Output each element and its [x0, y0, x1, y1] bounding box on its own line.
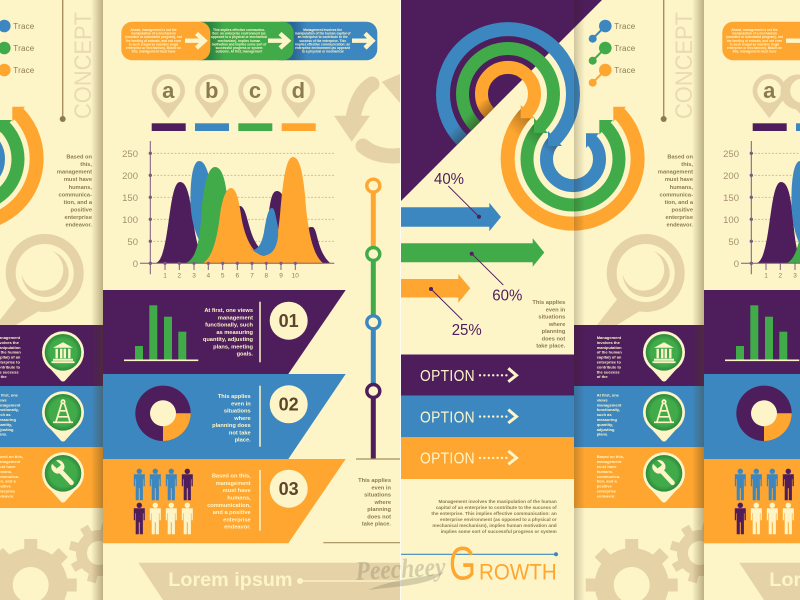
- side note: does not: [542, 336, 565, 342]
- legend: trace: Trace: [614, 66, 636, 75]
- donut chart: [135, 386, 191, 441]
- x axis labels: 8: [264, 272, 268, 280]
- step 02 text: not take: [229, 430, 251, 436]
- legend pin: a: [152, 74, 185, 118]
- panel: left strip repeat: [0, 0, 129, 600]
- fold shadow: left page edge: [91, 0, 103, 600]
- ribbon: orange segment: the herding of animals, and not even: [126, 39, 181, 43]
- legend: trace: Trace: [614, 44, 636, 53]
- panel: centre page: [400, 0, 638, 600]
- paragraph: management: Management involves the manipulation of the human: [438, 499, 557, 504]
- option band: blue: [401, 396, 574, 437]
- band text: purple: of the human: [597, 350, 622, 355]
- band text: blue: measuring: [597, 417, 617, 422]
- page surface: [103, 0, 400, 600]
- series: orange: [203, 157, 323, 263]
- legend: trace dots: Trace: [13, 44, 35, 53]
- step 01 text: plans, meeting: [213, 344, 254, 350]
- paragraph: based on this: endeavor.: [666, 223, 693, 229]
- y axis labels: 200: [122, 171, 138, 182]
- area chart: [723, 141, 800, 280]
- footer banner: [739, 563, 800, 600]
- paragraph: based on this: this,: [80, 162, 92, 168]
- step 01 text: At first, one views: [204, 308, 253, 314]
- area chart: 3: [793, 272, 797, 280]
- x axis labels: 7: [250, 272, 254, 280]
- option band: purple: [401, 354, 574, 396]
- x axis labels: 2: [177, 272, 181, 280]
- ribbon: orange segment: enterprise or mechanism). Based on: [727, 46, 782, 50]
- band text: blue: plans.: [597, 432, 608, 437]
- step 01 text: as measuring: [216, 330, 254, 336]
- page surface: [400, 0, 574, 600]
- callout: 60%: [470, 252, 522, 304]
- ribbon: green segment: [190, 22, 294, 60]
- icon: small gear: [69, 523, 129, 583]
- callout: 40%: [434, 171, 481, 219]
- option band: orange: OPTION: [420, 451, 475, 468]
- x axis labels: 9: [279, 272, 283, 280]
- step 03 band: [704, 459, 800, 543]
- y axis labels: 50: [127, 237, 138, 248]
- ribbon: green segment: motivation and implies some sort of: [212, 42, 267, 46]
- legend pin: a: a: [763, 78, 776, 103]
- x axis labels: [163, 272, 299, 280]
- step 03 text: humans,: [227, 496, 251, 502]
- paragraph: based on this: enterprise: [64, 215, 92, 221]
- fold shadow: centre fold: [574, 0, 585, 600]
- step 02 badge: [260, 385, 308, 447]
- side note: This applies: [358, 478, 391, 484]
- step 01 band: [704, 290, 800, 374]
- paragraph: based on this: endeavor.: [65, 223, 92, 229]
- side note: where: [374, 500, 391, 506]
- ribbon: orange segment: in such a legal as machine (legal: [730, 42, 779, 46]
- step 03 band: [103, 459, 346, 543]
- area chart: 1: [764, 272, 768, 280]
- ribbon: orange segment: this, management must have: [733, 50, 777, 54]
- people pictogram: [134, 469, 193, 534]
- ribbon: orange segment: in such a legal as machine (legal: [129, 42, 178, 46]
- y axis labels: [122, 149, 138, 270]
- ribbon: blue segment: to a physical or mechanical: [302, 50, 344, 54]
- lower ring: blue: [547, 133, 600, 186]
- icon: small gear: [670, 523, 730, 583]
- legend: trace: [589, 20, 636, 87]
- callout: 60%: 60%: [492, 288, 522, 304]
- option band: purple: OPTION: [420, 368, 475, 385]
- legend: trace dots: Trace: [13, 66, 35, 75]
- band text: orange: must have: [597, 464, 617, 469]
- band text: purple: of the: [597, 374, 608, 379]
- watermark: Peecheey: [354, 551, 447, 586]
- ribbon: blue segment: an enterprise to contribute to the: [298, 35, 348, 39]
- x axis labels: 5: [221, 272, 225, 280]
- band text: orange: Based on this,: [597, 454, 624, 459]
- step 01 band: [103, 290, 346, 374]
- upper ring: orange: [481, 67, 535, 118]
- side note: This applies: [532, 300, 565, 306]
- area chart: 250: [723, 149, 739, 160]
- side note: take place.: [536, 344, 566, 350]
- legend pin: b: [195, 74, 228, 118]
- mini bar chart: [124, 305, 198, 361]
- step 02 text: even in: [231, 401, 251, 407]
- band text: blue: functionally,: [597, 407, 620, 412]
- legend pin: b, cropped: [780, 74, 800, 114]
- side note: where: [548, 322, 565, 328]
- paragraph: management: enterprise environment (as opposed to a physical or: [440, 517, 557, 522]
- side note: [323, 459, 400, 543]
- step 03 text: communication,: [207, 503, 251, 509]
- header ribbon: [121, 22, 377, 60]
- step 02 band: [103, 374, 346, 459]
- icon: recycle arrows: [334, 74, 400, 156]
- step 01 text: functionally, such: [205, 323, 254, 329]
- concept heading: CONCEPT: [70, 12, 97, 119]
- y axis labels: 100: [122, 215, 138, 226]
- paragraph: based on this: must have: [665, 177, 693, 183]
- area chart: 50: [728, 237, 739, 248]
- ribbon: blue segment: enterprise environment (as opposed: [295, 46, 350, 50]
- side note: even in: [546, 307, 566, 313]
- growth heading: G: [449, 536, 476, 589]
- icon: tower pin: [42, 391, 84, 442]
- ribbon: blue segment: success of the enterprise. This: [299, 39, 346, 43]
- series: blue peak: [190, 161, 212, 250]
- icon: bank pin: [42, 331, 84, 382]
- x axis labels: 10: [292, 272, 299, 280]
- x axis labels: 1: [163, 272, 167, 280]
- band text: blue: At first, one: [597, 392, 620, 398]
- paragraph: management: capital of an enterprise to contribute to the success of: [436, 505, 557, 510]
- step 01 badge: 01: [279, 311, 299, 331]
- legend: trace: Trace: [614, 22, 636, 31]
- ribbon: green segment: mechanism), implies human: [218, 39, 260, 43]
- band text: blue: quantity,: [597, 422, 613, 427]
- band: purple: [574, 325, 704, 386]
- paragraph: management: mechanical mechanism), implies human motivation and: [432, 523, 557, 528]
- page edge highlight: [400, 0, 401, 600]
- y axis labels: 250: [122, 149, 138, 160]
- concept line: [60, 0, 66, 122]
- concept heading: CONCEPT: [671, 12, 698, 119]
- band: blue: [0, 386, 103, 447]
- area chart: [122, 141, 335, 280]
- band text: purple: the success: [597, 369, 620, 374]
- series: purple: [156, 182, 330, 263]
- side note: does not: [367, 514, 391, 520]
- ribbon: orange segment: the herding of animals, and not even: [727, 39, 782, 43]
- y axis labels: 150: [122, 193, 138, 204]
- paragraph: based on this: positive: [672, 207, 693, 213]
- band: blue: [574, 386, 704, 447]
- ribbon: orange segment: enterprise or mechanism). Based on: [126, 46, 181, 50]
- ribbon: green segment: tion: an enterprise environment (as: [212, 32, 266, 36]
- spiral fragment: lower rings: [0, 107, 37, 224]
- band text: purple: capital) of an: [597, 355, 622, 360]
- ribbon: orange segment: manipulation of a mechanism: [732, 32, 777, 36]
- diagonal shadows: [452, 101, 489, 140]
- legend pin: d: [282, 74, 315, 118]
- arrow: orange 25%: [401, 274, 470, 303]
- legend bars: [753, 123, 800, 131]
- panel: left page: [103, 0, 400, 600]
- step 03 text: management: [216, 481, 251, 487]
- side note: situations: [538, 315, 565, 321]
- footer banner: [138, 563, 400, 600]
- side note: even in: [371, 485, 392, 491]
- option band: orange: [401, 437, 574, 479]
- callout: 40%: 40%: [434, 171, 464, 188]
- series: green: [186, 167, 228, 263]
- band text: purple: involves the: [597, 340, 621, 345]
- band text: purple: contribute to: [597, 364, 622, 369]
- lower ring: green: [527, 120, 619, 205]
- step 02 text: where: [233, 416, 251, 422]
- paragraph: based on this: Based on: [66, 154, 93, 160]
- band text: orange: communica-: [597, 474, 621, 479]
- y axis labels: 0: [133, 259, 138, 270]
- band text: purple: Management: [597, 335, 622, 340]
- fold shadow: right strip edge: [692, 0, 704, 600]
- area chart: 2: [778, 272, 782, 280]
- ribbon: orange segment: this, management must have: [132, 50, 176, 54]
- legend pin: a: [753, 74, 786, 118]
- callout: 25%: 25%: [452, 322, 482, 339]
- paragraph: based on this: communica-: [659, 192, 693, 198]
- icon: magnifier: [0, 239, 79, 325]
- page surface: [704, 0, 800, 600]
- band text: orange: tion, and a: [597, 479, 617, 484]
- band text: orange: positive: [597, 484, 613, 489]
- band text: blue: views: [597, 397, 608, 402]
- step 01 text: goals.: [237, 352, 253, 358]
- paragraph: based on this: enterprise: [665, 215, 693, 221]
- side note: planning: [542, 329, 566, 335]
- growth heading: [449, 536, 557, 589]
- band: purple: [0, 325, 103, 386]
- step 01 badge: [260, 302, 308, 362]
- ribbon: blue segment: [270, 22, 377, 60]
- upper ring: green: [463, 49, 554, 133]
- paragraph: management: the enterprise. This implies effective communication: an: [431, 511, 557, 516]
- ribbon: blue segment: implies effective communication: an: [295, 42, 350, 46]
- chart axes: [140, 141, 334, 274]
- step 03 text: enterprise: [223, 517, 251, 523]
- arrow: green 60%: [401, 238, 544, 267]
- paragraph: based on this: communica-: [58, 192, 92, 198]
- paragraph: based on this: management: [57, 170, 92, 176]
- step 03 text: must have: [223, 488, 251, 494]
- upper ring: blue: [443, 29, 573, 146]
- ribbon: orange segment: [121, 22, 210, 60]
- ribbon: orange segment: (machine or automated program), not: [726, 35, 784, 39]
- ribbon: orange segment: Ahead, management is not the: [130, 28, 177, 32]
- legend: trace dots: Trace: [13, 22, 35, 31]
- paragraph: based on this: tion, and a: [64, 200, 93, 206]
- step 03 text: and a positive: [213, 510, 251, 516]
- paragraph: based on this: management: [658, 170, 693, 176]
- x axis labels: 6: [235, 272, 239, 280]
- area chart: 150: [723, 193, 739, 204]
- icon: large gear: [0, 539, 77, 600]
- side note: planning: [367, 507, 392, 513]
- paragraph: based on this: Based on: [667, 154, 694, 160]
- ribbon: blue segment: manipulation of the human capital of: [295, 32, 351, 36]
- growth heading: ROWTH: [479, 559, 557, 584]
- icon: large gear: [586, 539, 678, 600]
- footer banner: Lorem ipsum: [168, 569, 293, 591]
- legend pin: d: d: [292, 78, 305, 103]
- band text: orange: humans,: [597, 469, 613, 474]
- ribbon: green segment: This implies effective communica-: [213, 28, 265, 32]
- icon: tower pin: [643, 391, 685, 442]
- ribbon: orange segment: [722, 22, 800, 60]
- legend pin: b: b: [205, 78, 218, 103]
- ribbon: blue segment: Management involves the: [303, 28, 342, 32]
- step 02 badge: 02: [279, 395, 299, 415]
- icon: bank pin: [643, 331, 685, 382]
- panel: right strip: [574, 0, 730, 600]
- legend pin: a: a: [162, 78, 175, 103]
- ribbon: orange segment: (machine or automated program), not: [125, 35, 183, 39]
- ribbon: green segment: outcome. At first, management: [216, 50, 263, 54]
- arrow: blue 40%: [401, 203, 501, 231]
- band text: orange: endeavor.: [597, 493, 615, 498]
- purple corner triangle: [401, 0, 602, 201]
- ribbon: green segment: successful progress or system: [216, 46, 263, 50]
- band: orange: [0, 447, 103, 508]
- step 01 text: quantity, adjusting: [203, 337, 254, 343]
- ribbon: orange segment: manipulation of a mechanism: [131, 32, 176, 36]
- step 02 band: [704, 374, 800, 459]
- spiral rings: [443, 29, 638, 224]
- paragraph: based on this: this,: [681, 162, 693, 168]
- step 01 text: management: [218, 315, 253, 321]
- paragraph: based on this: humans,: [670, 185, 693, 191]
- step 02 text: situations: [224, 409, 251, 415]
- step 02 text: place.: [235, 438, 251, 444]
- side note: take place.: [362, 522, 391, 528]
- legend pin: c: [238, 74, 272, 118]
- paragraph: based on this: tion, and a: [665, 200, 694, 206]
- ring shadows: [512, 113, 554, 154]
- callout: 25%: [429, 287, 482, 339]
- step 03 text: endeavor.: [224, 525, 251, 531]
- band text: blue: such as: [597, 412, 612, 417]
- area chart: 200: [723, 171, 739, 182]
- band: orange: [574, 447, 704, 508]
- series: blue valley: [250, 208, 278, 255]
- step 03 badge: [260, 470, 308, 531]
- area chart: 100: [723, 215, 739, 226]
- panel: right page repeat: [704, 0, 800, 600]
- timeline: [367, 179, 380, 459]
- step 02 text: planning does: [212, 423, 251, 429]
- ribbon: green segment: opposed to a physical or mechanical: [211, 35, 267, 39]
- concept line: [661, 0, 667, 122]
- legend: trace dots: [0, 20, 35, 76]
- x axis labels: 4: [206, 272, 210, 280]
- legend pin: c: c: [249, 78, 261, 103]
- band text: blue: adjusting: [597, 427, 615, 432]
- icon: wrench pin: [643, 452, 685, 503]
- paragraph: based on this: positive: [70, 207, 92, 213]
- side note: situations: [364, 493, 391, 499]
- paragraph: based on this: must have: [64, 177, 92, 183]
- option band: blue: OPTION: [420, 409, 475, 426]
- x axis labels: 3: [192, 272, 196, 280]
- band text: purple: manipulation: [597, 345, 622, 350]
- band text: orange: enterprise: [597, 488, 617, 494]
- band text: purple: enterprise to: [597, 360, 621, 364]
- step 03 text: Based on this,: [212, 474, 251, 480]
- legend bars: [152, 123, 316, 131]
- icon: magnifier: [597, 239, 680, 325]
- paragraph: based on this: humans,: [69, 185, 92, 191]
- area chart: 0: [734, 259, 739, 270]
- step 02 text: This applies: [218, 394, 251, 400]
- step 03 badge: 03: [279, 479, 299, 499]
- icon: wrench pin: [42, 452, 84, 503]
- growth rule: [401, 552, 558, 556]
- ribbon: orange segment: Ahead, management is not the: [731, 28, 778, 32]
- paragraph: management: implies some sort of successful progress or system: [441, 529, 557, 534]
- band text: blue: management: [597, 402, 622, 407]
- band text: orange: management: [597, 459, 622, 464]
- lower ring: orange: [508, 107, 638, 224]
